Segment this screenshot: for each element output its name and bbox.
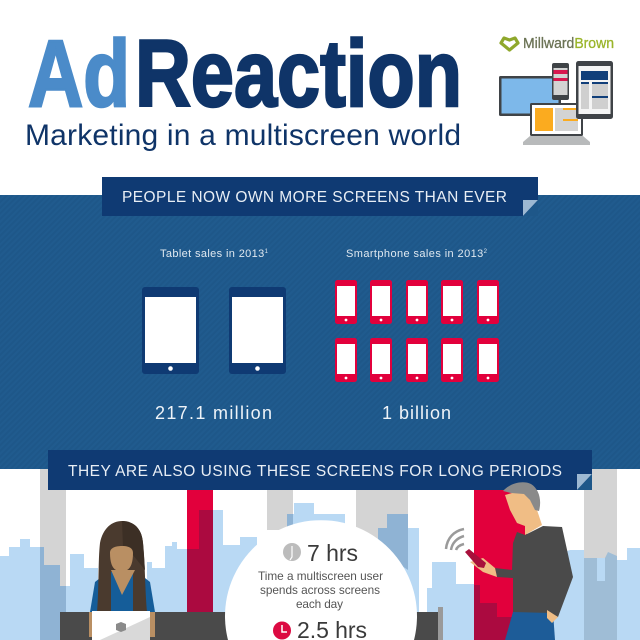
table post bbox=[438, 607, 443, 640]
banner: people own more screens: PEOPLE NOW OWN MORE SCREENS THAN EVER bbox=[122, 189, 507, 206]
figure: smartphone sales: 1 billion bbox=[382, 403, 451, 423]
table bbox=[60, 612, 438, 640]
icons: tablets bbox=[142, 287, 286, 374]
text: multiscreen time description: spends across screens bbox=[260, 583, 380, 597]
title: Ad bbox=[28, 21, 130, 127]
figure: tablet sales: 217.1 million bbox=[155, 403, 272, 423]
icons: smartphones bbox=[335, 280, 499, 382]
title bbox=[28, 21, 462, 127]
figure: man with phone bbox=[465, 482, 573, 640]
banner: long periods bbox=[48, 450, 592, 490]
banner: long periods: THEY ARE ALSO USING THESE SCREENS FOR LONG PERIODS bbox=[68, 463, 562, 480]
logo: Millward Brown: MillwardBrown bbox=[523, 36, 614, 52]
panel: screen ownership background bbox=[0, 195, 640, 469]
text: multiscreen time description bbox=[258, 569, 383, 611]
label: smartphone sales: Smartphone sales in 2013 bbox=[346, 248, 483, 260]
label: smartphone sales: 2 bbox=[484, 249, 488, 255]
text: multiscreen time description: Time a multiscreen user bbox=[258, 569, 383, 583]
icon: wifi signal bbox=[446, 529, 464, 550]
banner: people own more screens bbox=[102, 177, 538, 216]
subtitle: Marketing in a multiscreen world bbox=[25, 119, 461, 152]
icon: multiscreen devices bbox=[499, 61, 613, 145]
icon: grey clock bbox=[283, 543, 301, 561]
label: tablet sales: 1 bbox=[265, 249, 269, 255]
cityscape background bbox=[0, 469, 640, 640]
label: tablet sales: Tablet sales in 2013 bbox=[160, 248, 264, 260]
figure: woman with laptop bbox=[89, 521, 155, 640]
title: Reaction bbox=[135, 21, 462, 127]
callout: time spent bbox=[225, 520, 417, 640]
icon: red clock bbox=[273, 622, 291, 640]
figure: 7 hrs: 7 hrs bbox=[307, 540, 358, 566]
text: multiscreen time description: each day bbox=[296, 597, 343, 611]
